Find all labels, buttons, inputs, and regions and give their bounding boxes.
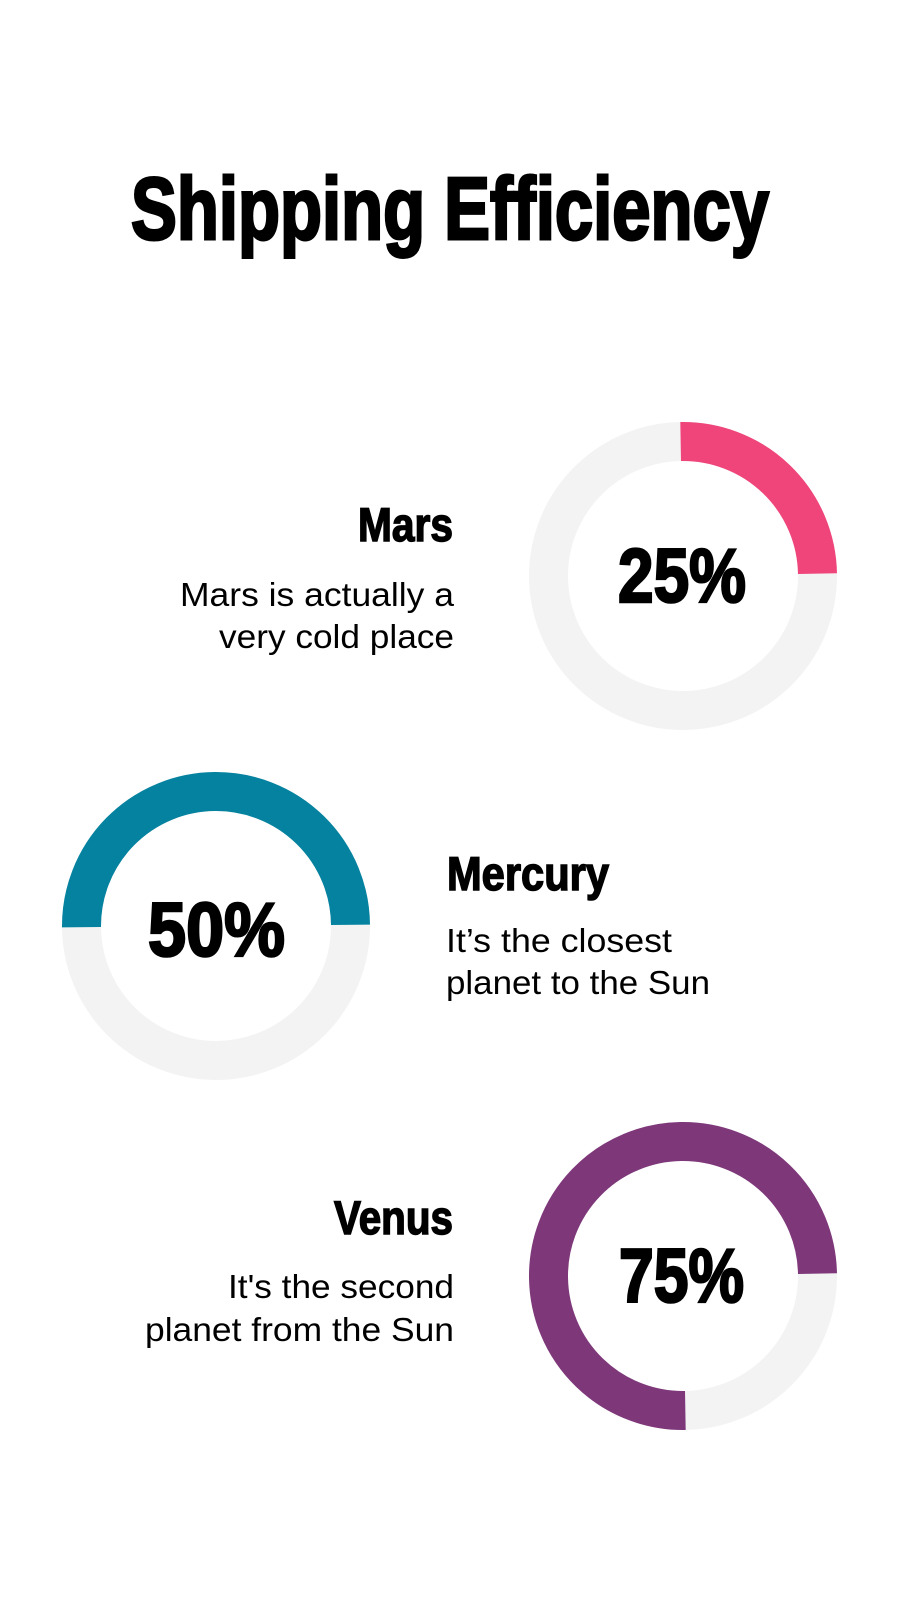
donut chart: 25%: 25% [618,534,746,619]
donut chart: 25% [546,439,820,713]
donut chart: 75% [546,1139,820,1413]
text block: Mercury description: planet to the Sun [446,964,710,1001]
donut chart: 75%: 75% [619,1234,744,1319]
text block: Venus description: It's the second [228,1268,454,1305]
heading: Mercury: Mercury [447,847,609,900]
text block: Mercury description [446,922,710,1001]
donut chart: 50%: 50% [148,888,285,973]
panel: Mercury [80,790,710,1062]
donut chart: 50% [80,790,352,1062]
heading: Venus: Venus [334,1191,453,1244]
panel: Mars [180,439,820,713]
text block: Mars description: Mars is actually a [180,576,455,613]
text block: Mars description [180,576,455,655]
heading: Mars: Mars [358,498,453,551]
text block: Mercury description: It’s the closest [446,922,672,959]
text block: Venus description [145,1268,454,1348]
text block: Venus description: planet from the Sun [145,1311,454,1348]
panel: Venus [145,1139,820,1413]
text block: Mars description: very cold place [219,618,454,655]
